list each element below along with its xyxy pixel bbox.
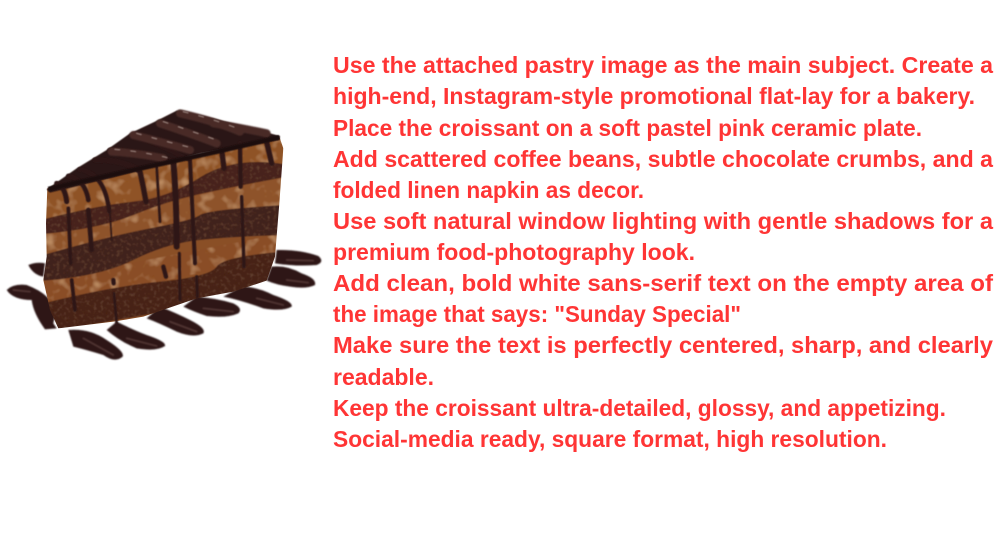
promotional prompt text: Use soft natural window lighting with gentle shadows for a [333,208,993,234]
top glaze [47,111,280,193]
ribbon highlights [115,112,240,158]
mousse layers [43,137,283,307]
promotional prompt text: Add scattered coffee beans, subtle chocolate crumbs, and a [333,146,993,172]
promotional prompt text: folded linen napkin as decor. [333,177,644,203]
promotional prompt text [333,52,993,452]
front glaze edge [48,137,279,189]
chocolate drizzle [57,135,272,323]
promotional prompt text: the image that says: "Sunday Special" [333,301,741,327]
promotional prompt text: Add clean, bold white sans-serif text on the empty area of [333,270,993,296]
sponge layers [43,162,283,333]
cake body [43,136,284,328]
chocolate pools [7,250,321,360]
promotional prompt text: Social-media ready, square format, high resolution. [333,426,887,452]
promotional prompt text: Make sure the text is perfectly centered, sharp, and clearly [333,332,993,358]
pool highlights [13,260,313,355]
promotional prompt text: high-end, Instagram-style promotional flat-lay for a bakery. [333,83,975,109]
promotional prompt text: Keep the croissant ultra-detailed, glossy, and appetizing. [333,395,946,421]
promotional prompt text: Place the croissant on a soft pastel pink ceramic plate. [333,115,922,141]
promotional prompt text: Use the attached pastry image as the main subject. Create a [333,52,993,78]
promotional prompt text: premium food-photography look. [333,239,695,265]
glaze ribbons [112,113,267,158]
cake photo illustration [7,107,321,360]
promotional prompt text: readable. [333,364,434,390]
